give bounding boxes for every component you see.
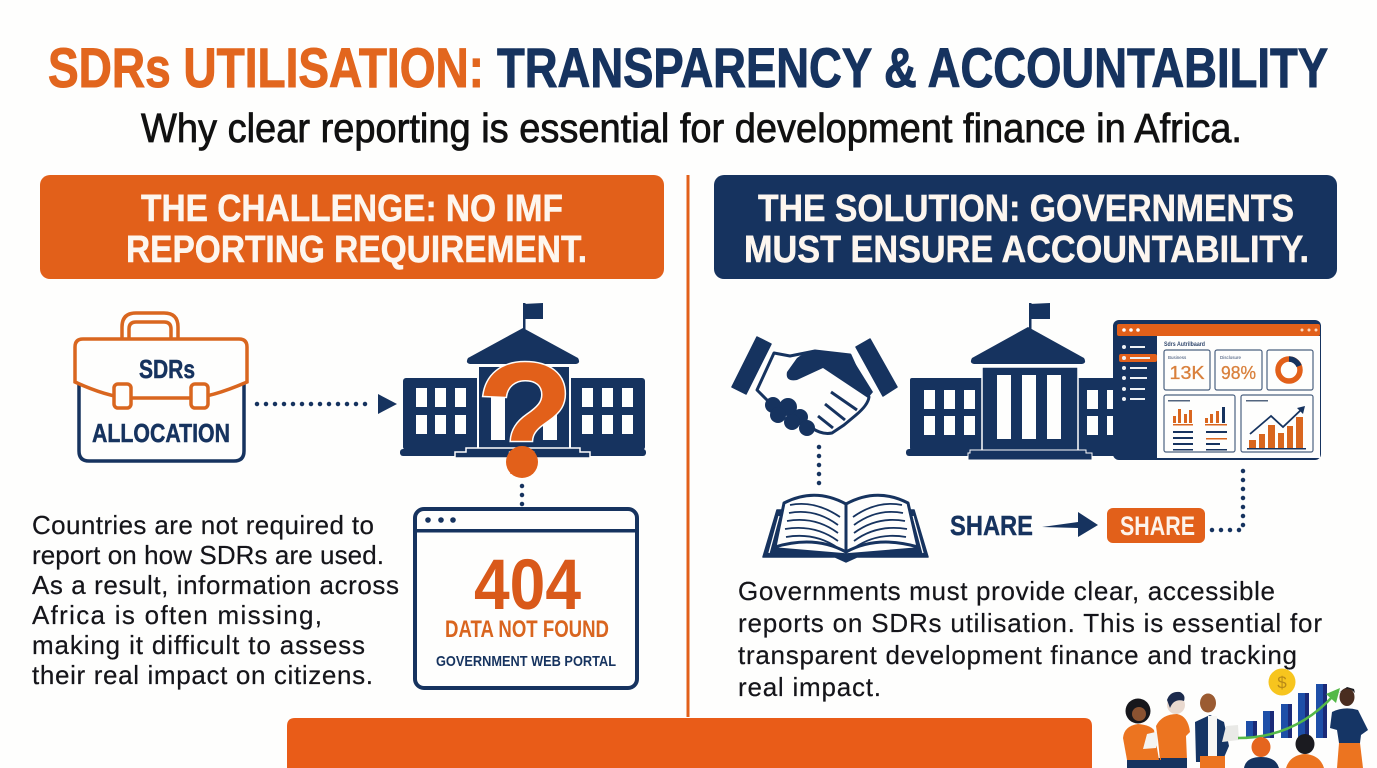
icon: open book [763,495,928,562]
icon: government building with question mark: ? [476,329,574,508]
panel: challenge heading: REPORTING REQUIREMENT. [126,229,587,271]
stat card: 98%: 98% [1221,363,1256,383]
text block: challenge description: report on how SDRs are used. [32,540,384,570]
button: share [1107,508,1205,543]
text block: challenge description: their real impact on citizens. [32,660,373,690]
icon: SDRs allocation briefcase [75,313,247,461]
arrow: allocation to government [257,394,397,414]
subtitle: Why clear reporting is essential for development finance in Africa. [141,105,1242,151]
audience member with orange hair [1244,737,1279,768]
panel: reporting dashboard [1113,320,1321,460]
stat card: 13K: Business [1168,355,1187,360]
arrow: share to button [1042,512,1098,537]
label: share: SHARE [950,510,1033,541]
title [48,36,1328,99]
person with tablet [1123,698,1187,768]
text block: challenge description: Countries are not required to [32,510,374,540]
button: share: SHARE [1120,511,1195,541]
text block: solution description: transparent development finance and tracking [738,640,1297,670]
bar chart [1246,684,1327,738]
line and bar chart card [1241,395,1313,452]
stat card: 13K: 13K [1170,363,1204,383]
presenter [1330,687,1368,768]
panel: 404 government web portal window [415,509,637,688]
panel: reporting dashboard: Sdrs Autrilbaard [1164,341,1205,348]
panel: challenge heading [40,175,664,279]
icon: SDRs allocation briefcase: ALLOCATION [92,418,230,448]
panel: bottom orange banner [287,718,1092,768]
person in orange shirt [1156,692,1190,768]
donut chart card [1267,350,1313,390]
icon: handshake [732,337,897,436]
icon: SDRs allocation briefcase: SDRs [139,354,195,384]
text block: challenge description: As a result, information across [32,570,399,600]
panel: 404 government web portal window: 404 [474,546,581,625]
stat card: 98%: Disclosure [1220,355,1242,360]
icon: coin: $ [1277,673,1287,692]
text block: solution description: reports on SDRs utilisation. This is essential for [738,608,1322,638]
panel: 404 government web portal window: GOVERNMENT WEB PORTAL [436,653,616,670]
panel: challenge heading: THE CHALLENGE: NO IMF [141,188,563,230]
bar lists card [1164,395,1235,452]
illustration: team reviewing growth chart [1123,668,1368,768]
panel: solution heading: MUST ENSURE ACCOUNTABILITY. [744,229,1309,271]
text block: challenge description [32,510,399,690]
audience member with dark hair [1286,734,1324,768]
icon: government building with question mark [400,303,646,508]
panel: solution heading: THE SOLUTION: GOVERNMENTS [758,188,1294,230]
dashboard sidebar [1119,345,1157,401]
person in navy jacket [1195,694,1239,768]
panel: solution heading [714,175,1337,279]
text block: challenge description: making it difficult to assess [32,630,365,660]
text block: solution description [738,576,1322,702]
panel: 404 government web portal window: DATA NOT FOUND [445,616,609,643]
text block: challenge description: Africa is often missing, [32,600,322,630]
green growth arrow [1238,688,1340,738]
stat card: 13K [1164,350,1210,390]
title: SDRs UTILISATION: [48,36,484,99]
text block: solution description: real impact. [738,672,881,702]
text block: solution description: Governments must provide clear, accessible [738,576,1275,606]
connector: share to dashboard [1212,468,1243,530]
stat card: 98% [1215,350,1262,390]
icon: coin [1268,668,1296,696]
icon: government building with columns [906,303,1122,460]
